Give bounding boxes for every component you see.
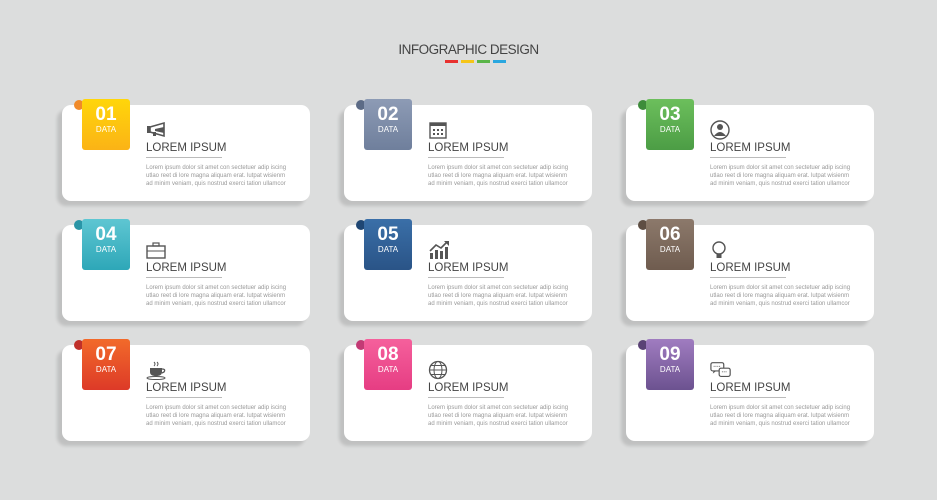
tab 06: DATA: [660, 245, 680, 254]
tab 02: DATA: [378, 125, 398, 134]
tab 09: [646, 339, 694, 390]
panel: 03: LOREM IPSUM: [710, 142, 791, 154]
panel: 06: [620, 219, 874, 327]
panel: 05: LOREM IPSUM: [428, 262, 509, 274]
panel: 04: LOREM IPSUM: [146, 262, 227, 274]
panel: 04: ad minim veniam, quis nostrud exerci tation ullamcor: [146, 301, 286, 307]
tab 09: 09: [659, 344, 681, 365]
panel: 07: [56, 339, 310, 447]
icon: coffee cup: [146, 362, 166, 380]
tab 09: DATA: [660, 365, 680, 374]
panel: 08: [338, 339, 592, 447]
panel: 07: LOREM IPSUM: [146, 382, 227, 394]
icon: chart: [430, 241, 449, 259]
panel: 03: utlao reet di lore magna aliquam erat. lutpat wisienm: [710, 173, 849, 179]
panel: 06: Lorem ipsum dolor sit amet con sectetuer adip iscing: [710, 285, 850, 291]
icon: briefcase: [146, 242, 166, 259]
panel: 09: [620, 339, 874, 447]
panel: 02: utlao reet di lore magna aliquam erat. lutpat wisienm: [428, 173, 567, 179]
panel: 06: ad minim veniam, quis nostrud exerci tation ullamcor: [710, 301, 850, 307]
panel: 03: ad minim veniam, quis nostrud exerci tation ullamcor: [710, 181, 850, 187]
panel: 07: Lorem ipsum dolor sit amet con sectetuer adip iscing: [146, 405, 286, 411]
icon: bulb: [712, 241, 726, 258]
tab 07: DATA: [96, 365, 116, 374]
panel: 02: [338, 99, 592, 207]
panel: 03: [620, 99, 874, 207]
tab 03: 03: [659, 104, 681, 125]
tab 08: 08: [377, 344, 399, 365]
panel: 04: Lorem ipsum dolor sit amet con sectetuer adip iscing: [146, 285, 286, 291]
tab 01: DATA: [96, 125, 116, 134]
panel: 05: Lorem ipsum dolor sit amet con sectetuer adip iscing: [428, 285, 568, 291]
panel: 08: Lorem ipsum dolor sit amet con sectetuer adip iscing: [428, 405, 568, 411]
panel: 08: ad minim veniam, quis nostrud exerci tation ullamcor: [428, 421, 568, 427]
panel: 09: LOREM IPSUM: [710, 382, 791, 394]
title color bars: [445, 60, 506, 63]
panel: 05: [338, 219, 592, 327]
tab 03: [646, 99, 694, 150]
tab 07: [82, 339, 130, 390]
icon: calendar: [429, 122, 447, 139]
tab 05: 05: [377, 224, 399, 245]
tab 02: [364, 99, 412, 150]
panel: 04: utlao reet di lore magna aliquam erat. lutpat wisienm: [146, 293, 285, 299]
icon: person: [710, 120, 730, 140]
tab 02: 02: [377, 104, 399, 125]
panel: 09: ad minim veniam, quis nostrud exerci tation ullamcor: [710, 421, 850, 427]
tab 05: DATA: [378, 245, 398, 254]
tab 03: DATA: [660, 125, 680, 134]
panel: 01: [56, 99, 310, 207]
tab 06: [646, 219, 694, 270]
panel: 02: Lorem ipsum dolor sit amet con sectetuer adip iscing: [428, 165, 568, 171]
tab 01: [82, 99, 130, 150]
tab 06: 06: [659, 224, 681, 245]
panel: 01: LOREM IPSUM: [146, 142, 227, 154]
panel: 01: Lorem ipsum dolor sit amet con sectetuer adip iscing: [146, 165, 286, 171]
panel: 04: [56, 219, 310, 327]
tab 04: [82, 219, 130, 270]
panel: 08: utlao reet di lore magna aliquam erat. lutpat wisienm: [428, 413, 567, 419]
panel: 05: utlao reet di lore magna aliquam erat. lutpat wisienm: [428, 293, 567, 299]
panel: 08: LOREM IPSUM: [428, 382, 509, 394]
panel: 02: ad minim veniam, quis nostrud exerci tation ullamcor: [428, 181, 568, 187]
tab 04: 04: [95, 224, 117, 245]
panel: 01: utlao reet di lore magna aliquam erat. lutpat wisienm: [146, 173, 285, 179]
tab 01: 01: [95, 104, 117, 125]
panel: 06: utlao reet di lore magna aliquam erat. lutpat wisienm: [710, 293, 849, 299]
icon: globe: [428, 360, 448, 380]
icon: megaphone: [147, 122, 165, 137]
tab 04: DATA: [96, 245, 116, 254]
icon: chat: [710, 362, 731, 377]
tab 05: [364, 219, 412, 270]
panel: 01: ad minim veniam, quis nostrud exerci tation ullamcor: [146, 181, 286, 187]
panel: 05: ad minim veniam, quis nostrud exerci tation ullamcor: [428, 301, 568, 307]
title: INFOGRAPHIC DESIGN: [398, 42, 539, 57]
tab 08: [364, 339, 412, 390]
panel: 02: LOREM IPSUM: [428, 142, 509, 154]
panel: 07: utlao reet di lore magna aliquam erat. lutpat wisienm: [146, 413, 285, 419]
panel: 03: Lorem ipsum dolor sit amet con sectetuer adip iscing: [710, 165, 850, 171]
tab 07: 07: [95, 344, 117, 365]
panel: 09: utlao reet di lore magna aliquam erat. lutpat wisienm: [710, 413, 849, 419]
panel: 09: Lorem ipsum dolor sit amet con sectetuer adip iscing: [710, 405, 850, 411]
panel: 06: LOREM IPSUM: [710, 262, 791, 274]
tab 08: DATA: [378, 365, 398, 374]
panel: 07: ad minim veniam, quis nostrud exerci tation ullamcor: [146, 421, 286, 427]
